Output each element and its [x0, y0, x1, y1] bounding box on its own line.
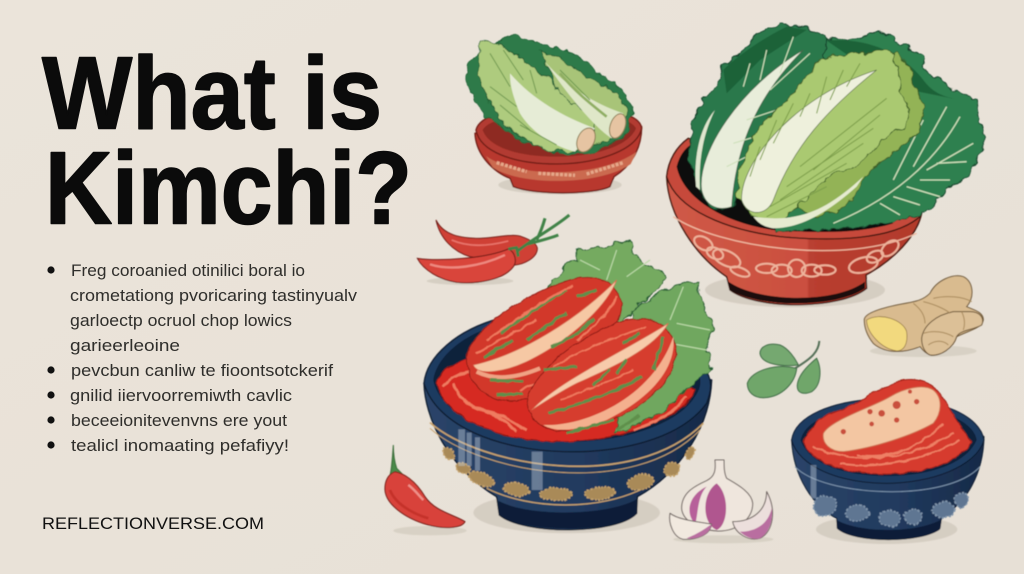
food illustrations: [385, 23, 984, 544]
title: Kimchi?: [45, 130, 412, 246]
lettuce leaves: [473, 240, 713, 433]
cabbage leaves: [465, 35, 633, 155]
bullet list: beceeionitevenvns ere yout: [71, 412, 287, 430]
basil leaves: [747, 341, 820, 398]
main navy bowl of kimchi: [424, 240, 713, 533]
glaze highlights: [458, 429, 543, 490]
gold band: [430, 423, 703, 505]
small navy bowl of kimchi: [792, 380, 984, 544]
large red bowl with cabbage: [667, 23, 983, 307]
website footer: REFLECTIONVERSE.COM: [42, 515, 264, 533]
bullet list: garloectp ocruol chop lowics: [70, 312, 292, 330]
dark leaves: [688, 23, 983, 232]
white ribs: [701, 50, 803, 208]
bullet list: crometationg pvoricaring tastinyualv: [70, 287, 358, 305]
bullet list: Freg coroanied otinilici boral io: [71, 262, 305, 280]
kimchi wedge left: [467, 277, 622, 401]
bullet list: tealicl inomaating pefafiyy!: [71, 437, 289, 455]
bullet list: [47, 262, 358, 455]
bullet list: gnilid iiervoorremiwth cavlic: [70, 387, 292, 405]
chili stems: [508, 215, 569, 257]
kimchi pile: [803, 380, 972, 474]
garlic bulb and cloves: [670, 460, 773, 543]
red chili pepper: [385, 445, 467, 535]
blue flowers: [814, 493, 968, 526]
light leaf: [737, 50, 923, 227]
title: [42, 36, 412, 246]
kimchi sauce base: [437, 340, 695, 442]
floral motifs: [692, 233, 901, 279]
gold flowers: [441, 445, 697, 501]
ginger root: [864, 276, 983, 357]
small red bowl with cabbage: [465, 35, 642, 194]
bullet list: pevcbun canliw te fioontsotckerif: [71, 362, 333, 380]
bullet list: garieerleoine: [70, 337, 180, 355]
kimchi wedge right: [527, 319, 676, 431]
title: What is: [42, 36, 382, 150]
chili peppers pair: [417, 215, 569, 285]
right leaf veins: [833, 107, 973, 223]
